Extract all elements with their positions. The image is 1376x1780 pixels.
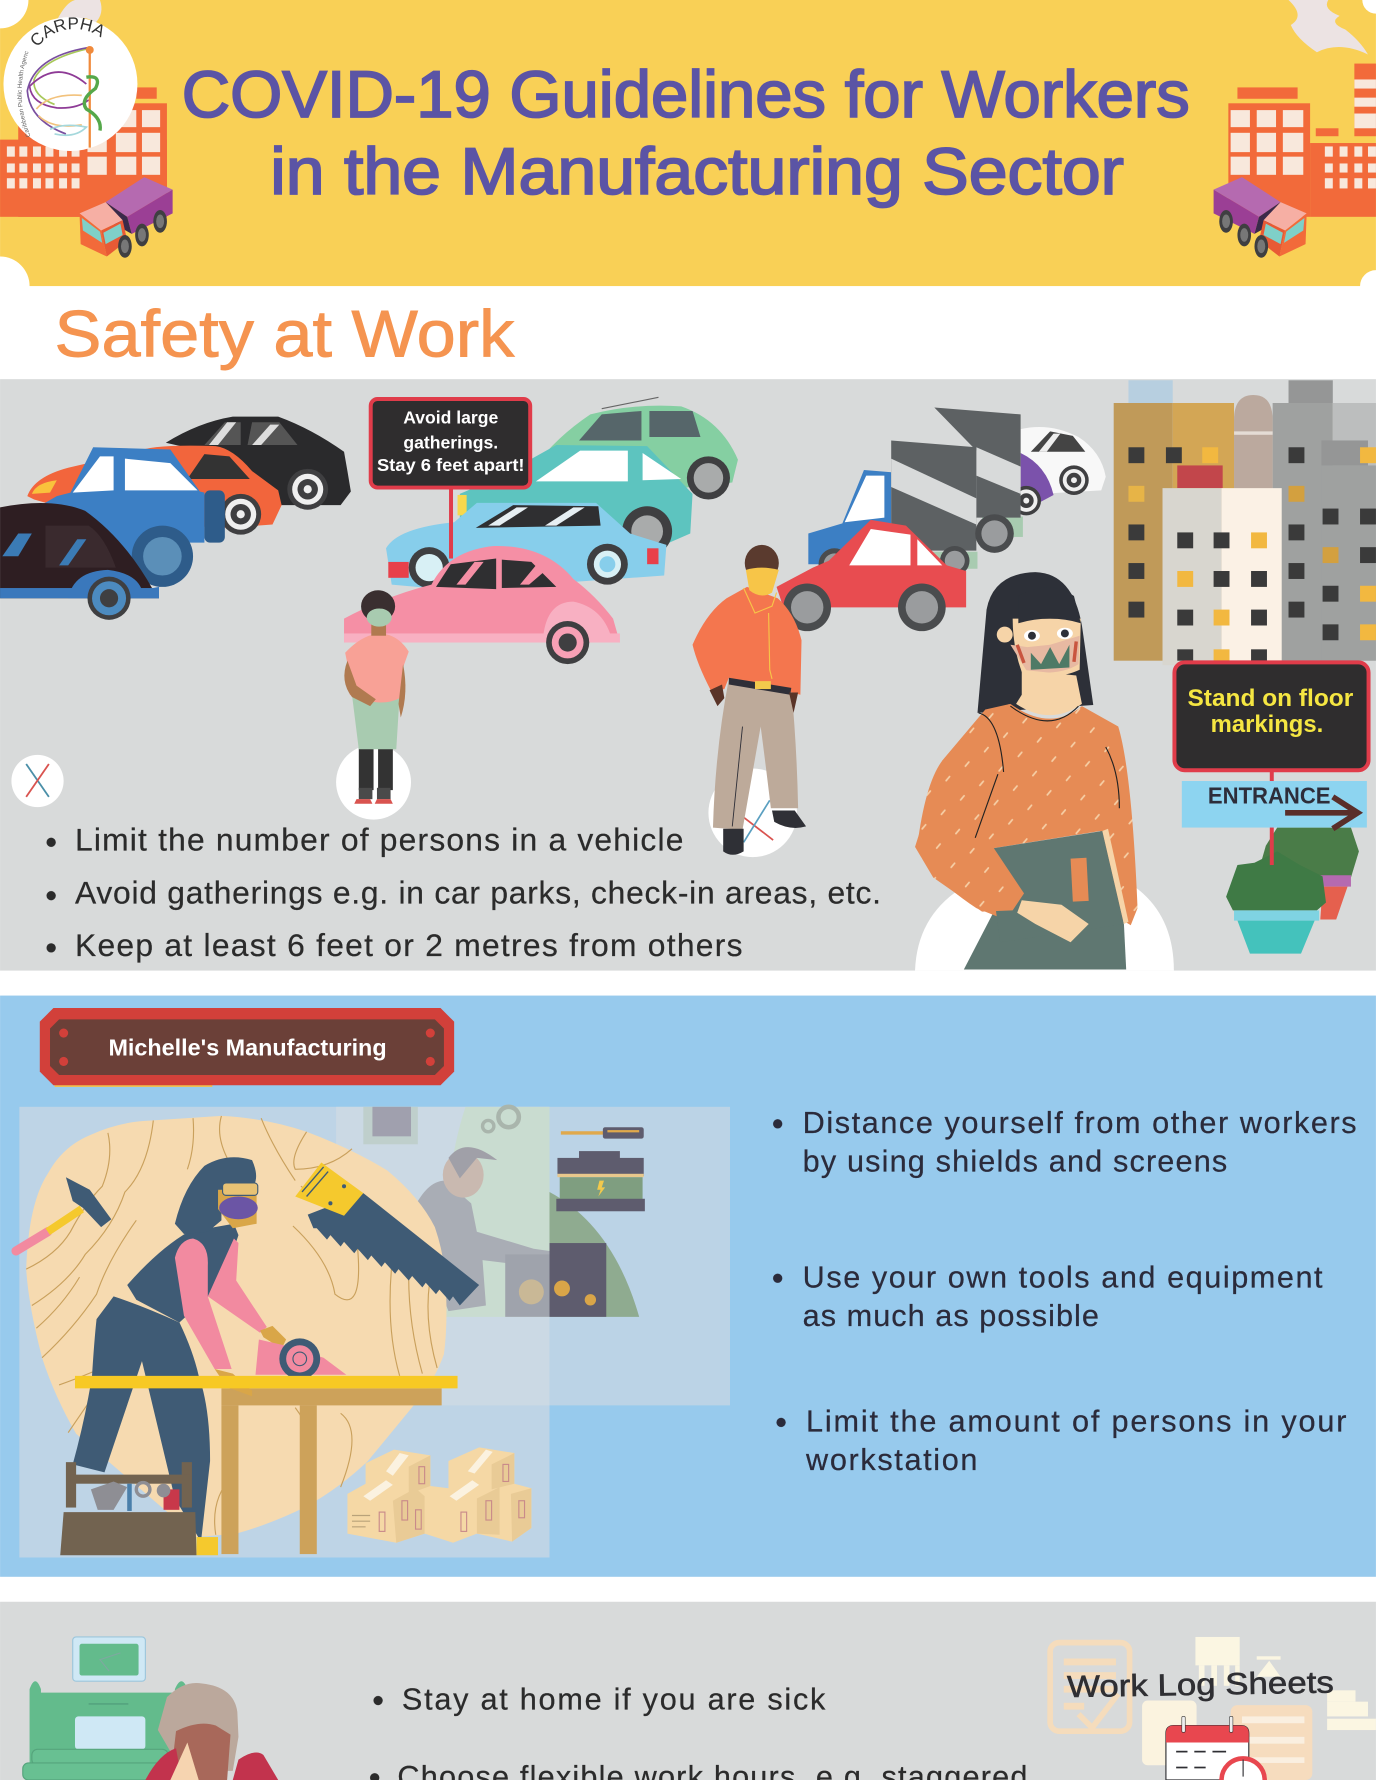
bed [23, 1681, 187, 1780]
icon: floor marking X [11, 755, 64, 807]
CARPHA logo: CARPHA [31, 17, 103, 45]
truck left [80, 177, 173, 258]
worker with goggles and mask [73, 1157, 286, 1555]
red car [777, 520, 966, 631]
bullet list: distancing at workstation: by using shields and screens [803, 1145, 1227, 1179]
bullet list: distancing at workstation: as much as possible [803, 1299, 1099, 1333]
framed picture [73, 1637, 145, 1681]
cardboard boxes [347, 1447, 531, 1543]
person: small woman with mask [336, 590, 411, 820]
faded log sheet icons [1050, 1637, 1376, 1780]
smoke right [1289, 0, 1368, 54]
CARPHA logo [4, 17, 138, 151]
green car [534, 397, 738, 499]
factory left [0, 87, 167, 217]
truck right [1214, 177, 1307, 258]
bullet list: distancing at workstation: Distance yourself from other workers [803, 1106, 1357, 1140]
person sneezing [145, 1683, 278, 1780]
pink beetle [344, 546, 620, 664]
title: in the Manufacturing Sector [270, 134, 1124, 208]
blue jeep [27, 447, 225, 587]
header banner [0, 0, 1376, 286]
person: woman with folder [915, 572, 1174, 971]
bullet list: sick and hours: Stay at home if you are sick [402, 1683, 826, 1717]
bullet list: distancing at workstation: Use your own tools and equipment [803, 1260, 1323, 1294]
black car [166, 417, 351, 510]
heading: Safety at Work: Safety at Work [55, 296, 515, 370]
hammer [16, 1177, 111, 1251]
factory right [1228, 64, 1376, 217]
table [221, 1388, 442, 1554]
sign: stand on floor markings [1174, 662, 1369, 770]
sign: entrance: ENTRANCE [1208, 783, 1331, 809]
faded mechanic scene [363, 1107, 639, 1317]
panel: workshop [0, 996, 1376, 1577]
bullet list: vehicles and distance: Limit the number of persons in a vehicle [75, 821, 683, 857]
title [182, 57, 1190, 208]
bullet list: distancing at workstation: workstation [805, 1443, 977, 1477]
sign post: avoid large gatherings [449, 488, 453, 559]
sign: stand on floor markings: markings. [1211, 711, 1323, 738]
bullet list: sick and hours [370, 1683, 1027, 1780]
bullet list: vehicles and distance [47, 821, 881, 963]
bullet list: vehicles and distance: Keep at least 6 feet or 2 metres from others [75, 927, 742, 963]
screwdriver [561, 1127, 644, 1139]
orange car [27, 446, 282, 535]
battery [556, 1151, 645, 1211]
sign: avoid large gatherings [371, 399, 530, 488]
dump truck [808, 408, 1023, 580]
smoke left [57, 0, 101, 27]
panel: safety at work [0, 379, 1376, 971]
light blue car [386, 503, 666, 590]
teal car [458, 445, 693, 556]
table top [75, 1376, 458, 1388]
banner corner notches [0, 0, 1376, 316]
icon: calendar with clock [1166, 1716, 1265, 1780]
plaque: Michelle's Manufacturing [40, 1008, 454, 1087]
toolbox [60, 1462, 196, 1555]
banner background [0, 0, 1376, 286]
sign post: entrance [1270, 772, 1274, 865]
sander [255, 1338, 346, 1379]
bullet list: vehicles and distance: Avoid gatherings e.g. in car parks, check-in areas, etc. [75, 875, 881, 911]
panel background [0, 1602, 1376, 1780]
sign: avoid large gatherings: Stay 6 feet apart! [377, 455, 525, 475]
title: COVID-19 Guidelines for Workers [182, 57, 1190, 131]
bullet list: distancing at workstation: Limit the amount of persons in your [806, 1404, 1346, 1438]
sign: entrance [1182, 781, 1367, 829]
person: man with yellow mask [693, 545, 806, 857]
panel background [0, 379, 1376, 971]
sign: avoid large gatherings: Avoid large [403, 407, 499, 427]
plaque: Michelle's Manufacturing: Michelle's Manufacturing [108, 1035, 387, 1061]
heading: Work Log Sheets: Work Log Sheets [1067, 1666, 1334, 1704]
bullet list: distancing at workstation [773, 1106, 1357, 1477]
illustration panels [19, 1107, 730, 1558]
plants [1226, 828, 1359, 954]
saw [295, 1162, 479, 1305]
sign: stand on floor markings: Stand on floor [1187, 685, 1353, 712]
white car and purple car [1012, 427, 1106, 515]
panel: sick and work logs [0, 1602, 1376, 1780]
dark beetle [0, 503, 159, 620]
sign: avoid large gatherings: gatherings. [403, 432, 498, 452]
wood grain blob [26, 1116, 446, 1537]
panel background [0, 996, 1376, 1577]
buildings [1114, 380, 1376, 665]
